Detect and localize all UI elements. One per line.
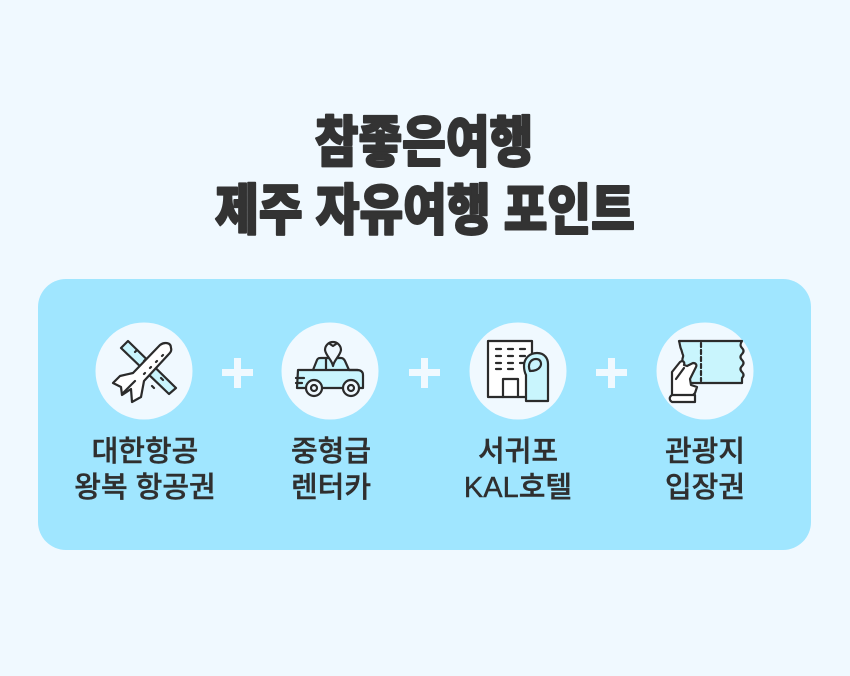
title: 참좋은여행	[315, 111, 533, 174]
label: flight: 왕복 항공권	[74, 472, 216, 504]
item: flight	[74, 322, 216, 504]
label: flight	[74, 435, 216, 504]
plus	[409, 358, 440, 388]
label: hotel: KAL호텔	[464, 472, 572, 504]
label: rental car	[291, 435, 371, 504]
label: hotel: 서귀포	[478, 435, 558, 468]
panel: package contents	[38, 279, 811, 550]
label: hotel	[464, 435, 572, 504]
label: flight: 대한항공	[92, 435, 198, 468]
icon: hotel	[470, 322, 566, 420]
item: rental car	[282, 322, 378, 504]
icon: car	[282, 322, 378, 420]
label: attraction ticket: 입장권	[665, 471, 745, 504]
plus	[596, 358, 627, 388]
item: attraction ticket	[656, 322, 754, 504]
plus	[222, 358, 253, 388]
label: rental car: 중형급	[291, 435, 371, 468]
item: hotel	[464, 322, 572, 504]
title: 제주 자유여행 포인트	[215, 179, 635, 242]
label: attraction ticket	[665, 435, 745, 504]
icon: ticket in hand	[656, 322, 754, 420]
icon: airplane	[96, 322, 192, 420]
label: attraction ticket: 관광지	[665, 435, 745, 468]
label: rental car: 렌터카	[291, 471, 371, 504]
title	[215, 111, 635, 242]
